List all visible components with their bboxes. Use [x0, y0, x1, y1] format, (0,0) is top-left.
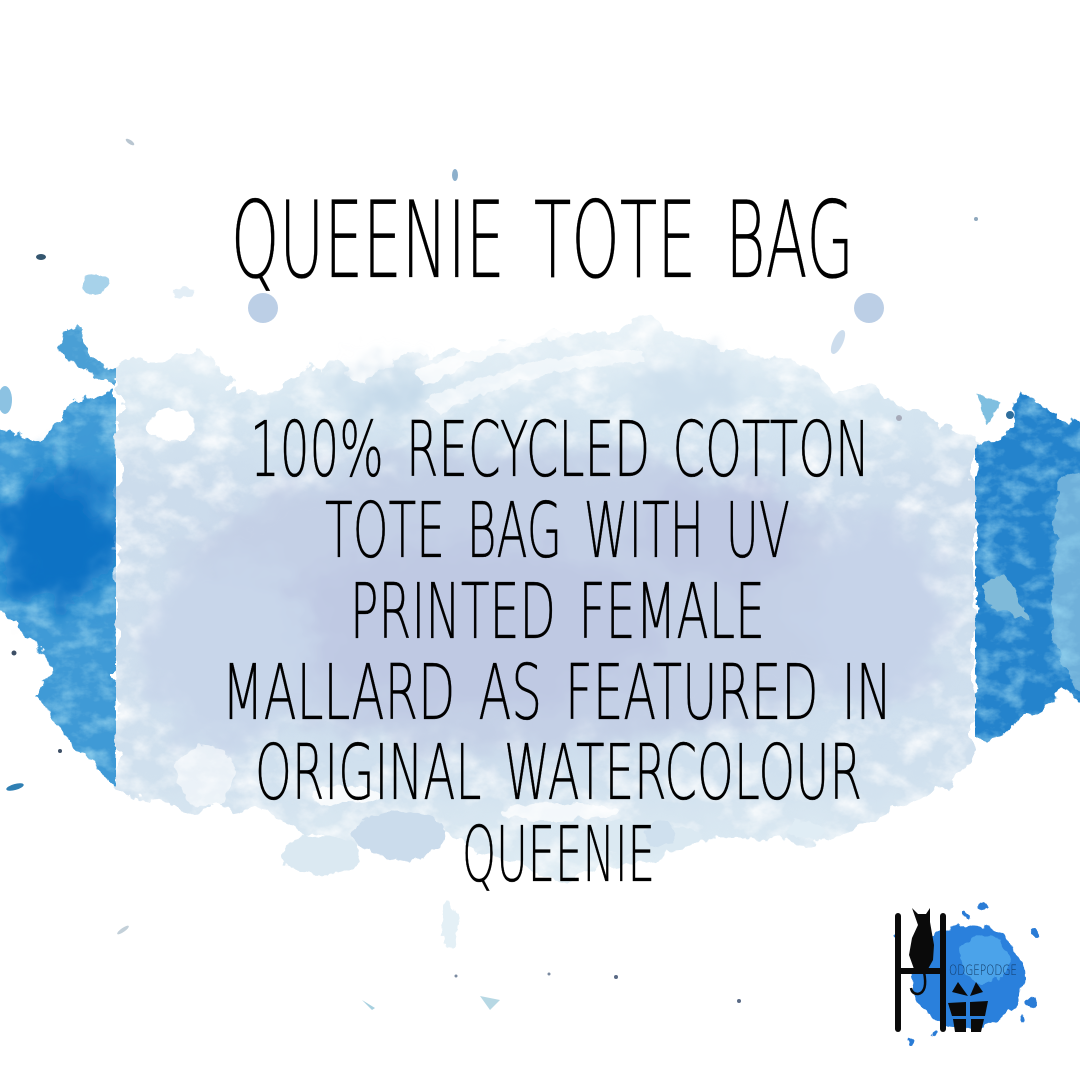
left watercolour blob: [0, 325, 126, 785]
paint splatter dots: [0, 137, 1014, 1010]
right watercolour blob: [975, 392, 1080, 745]
description text block: QUEENIE: [462, 811, 655, 900]
watercolour wash: central pale splash: [116, 286, 975, 951]
description text block: [222, 406, 892, 900]
logo wordmark: ODGEPODGE: [949, 963, 1017, 979]
description text block: PRINTED FEMALE: [350, 568, 765, 657]
icon: gift box: [948, 982, 988, 1032]
icon: cat: [909, 908, 934, 969]
logo blue splash: [890, 900, 1037, 1046]
logo: Hodgepodge: [890, 900, 1037, 1046]
icon: cat tail: [911, 972, 925, 994]
logo letter H: [898, 916, 943, 1029]
